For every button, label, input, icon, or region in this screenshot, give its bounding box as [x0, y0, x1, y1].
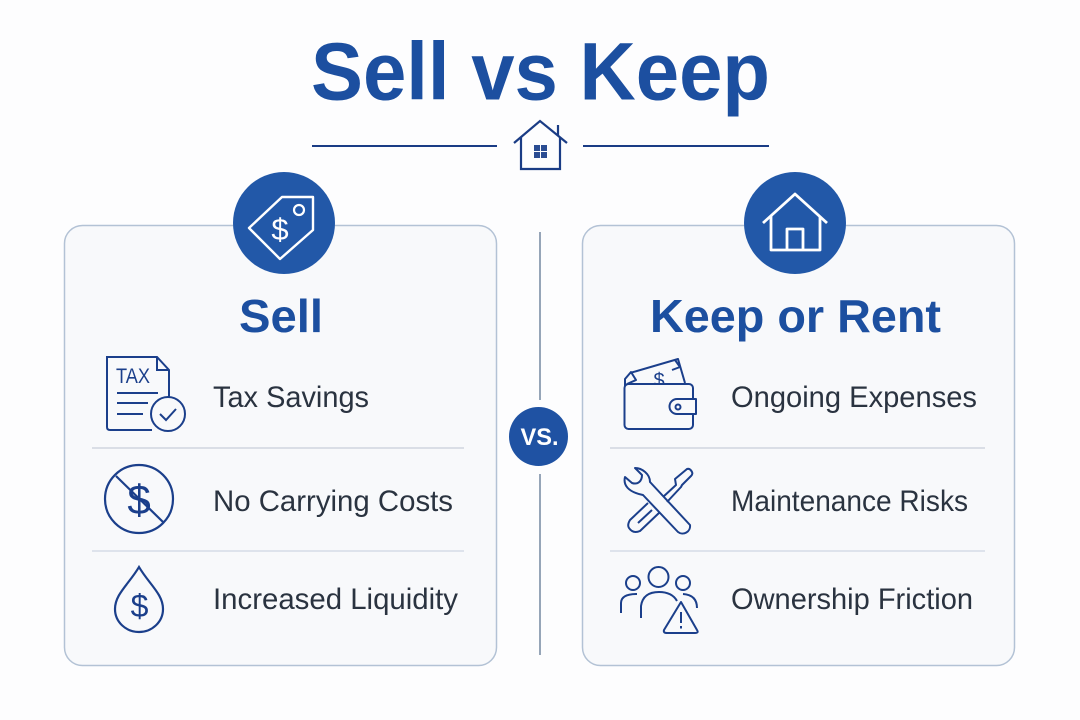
label: No Carrying Costs [213, 485, 453, 518]
icon: price tag badge [233, 172, 335, 274]
label: Ongoing Expenses [731, 381, 977, 414]
icon: people with warning [621, 567, 698, 633]
heading: keep or rent: Keep or Rent [650, 290, 941, 342]
panel: sell [64, 172, 496, 666]
icon: small house [514, 121, 567, 169]
icon: wallet: $ [653, 370, 665, 392]
icon: house badge [744, 172, 846, 274]
icon: crossed dollar: $ [127, 476, 151, 523]
header divider with house icon [312, 121, 769, 169]
icon: money drop: $ [131, 588, 149, 624]
panel: keep or rent [582, 172, 1014, 666]
icon: money drop [115, 567, 163, 632]
icon: crossed dollar [105, 465, 173, 533]
row: no carrying costs [105, 465, 453, 533]
heading: sell: Sell [239, 290, 323, 342]
title: Sell vs Keep [311, 26, 770, 118]
row: ongoing expenses [624, 359, 977, 429]
row: maintenance risks [625, 468, 968, 534]
icon: tax document [107, 357, 185, 431]
row: tax savings [107, 357, 369, 431]
icon: price tag badge: $ [271, 212, 289, 247]
row: increased liquidity [115, 567, 458, 632]
center divider [539, 232, 541, 655]
row: ownership friction [621, 567, 973, 633]
label: Increased Liquidity [213, 583, 458, 616]
label: Maintenance Risks [731, 485, 968, 518]
vs badge: VS. [520, 424, 558, 451]
label: Tax Savings [213, 381, 369, 414]
label: Ownership Friction [731, 583, 973, 616]
icon: wallet [624, 359, 696, 429]
icon: tax document: TAX [116, 365, 150, 388]
vs badge [509, 407, 568, 466]
icon: wrench and screwdriver [625, 468, 692, 534]
